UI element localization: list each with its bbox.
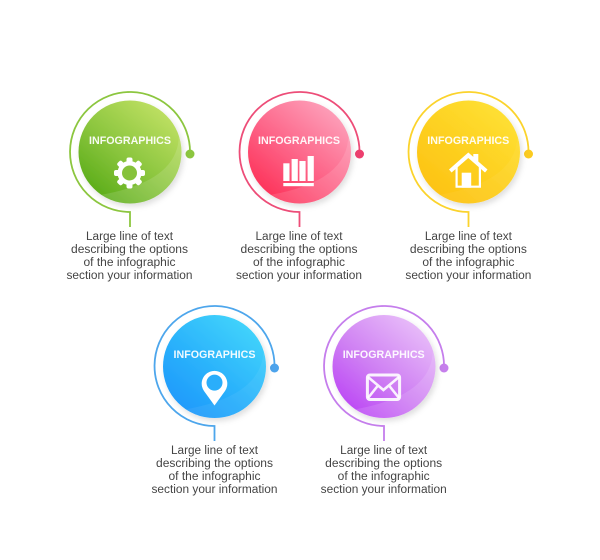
description: of the infographic [338, 471, 430, 483]
icon: gear [114, 158, 145, 188]
yellow disc [417, 100, 524, 208]
description: describing the options [410, 244, 527, 256]
blue ring with end dot [155, 306, 279, 441]
icon: bar chart [283, 156, 314, 186]
description: section your information [405, 270, 531, 282]
panel: yellow option with house [405, 92, 538, 282]
green disc [78, 100, 186, 208]
description [405, 231, 531, 282]
description: of the infographic [84, 257, 176, 269]
heading: INFOGRAPHICS [89, 135, 171, 147]
description: describing the options [325, 458, 442, 470]
heading: INFOGRAPHICS [174, 349, 256, 361]
icon: house [449, 152, 488, 188]
description [236, 231, 362, 282]
description [66, 231, 192, 282]
description: describing the options [156, 458, 273, 470]
yellow ring with end dot [409, 92, 533, 227]
panel: green option with gear [66, 92, 200, 282]
description: Large line of text [86, 231, 174, 243]
panel: purple option with envelope [321, 306, 454, 496]
description: describing the options [240, 244, 358, 256]
pink ring with end dot [240, 92, 364, 227]
pink disc [248, 100, 355, 208]
heading: INFOGRAPHICS [427, 135, 509, 147]
heading: INFOGRAPHICS [343, 349, 425, 361]
panel: pink option with bar chart [236, 92, 370, 282]
description: of the infographic [422, 257, 515, 269]
purple disc [332, 315, 440, 423]
description: of the infographic [168, 471, 261, 483]
description: section your information [321, 484, 447, 496]
blue disc [163, 315, 270, 423]
description [321, 445, 447, 496]
description: Large line of text [340, 445, 428, 457]
description: of the infographic [253, 257, 345, 269]
purple ring with end dot [324, 306, 448, 441]
description: Large line of text [171, 445, 259, 457]
description: Large line of text [256, 231, 343, 243]
heading: INFOGRAPHICS [258, 135, 340, 147]
description: describing the options [71, 244, 188, 256]
description: section your information [152, 484, 278, 496]
icon: map pin [202, 371, 227, 406]
green ring with end dot [70, 92, 194, 227]
icon: envelope [367, 375, 400, 400]
panel: blue option with map pin [152, 306, 284, 496]
description: section your information [66, 270, 192, 282]
description: Large line of text [425, 231, 513, 243]
description [152, 445, 278, 496]
description: section your information [236, 270, 362, 282]
